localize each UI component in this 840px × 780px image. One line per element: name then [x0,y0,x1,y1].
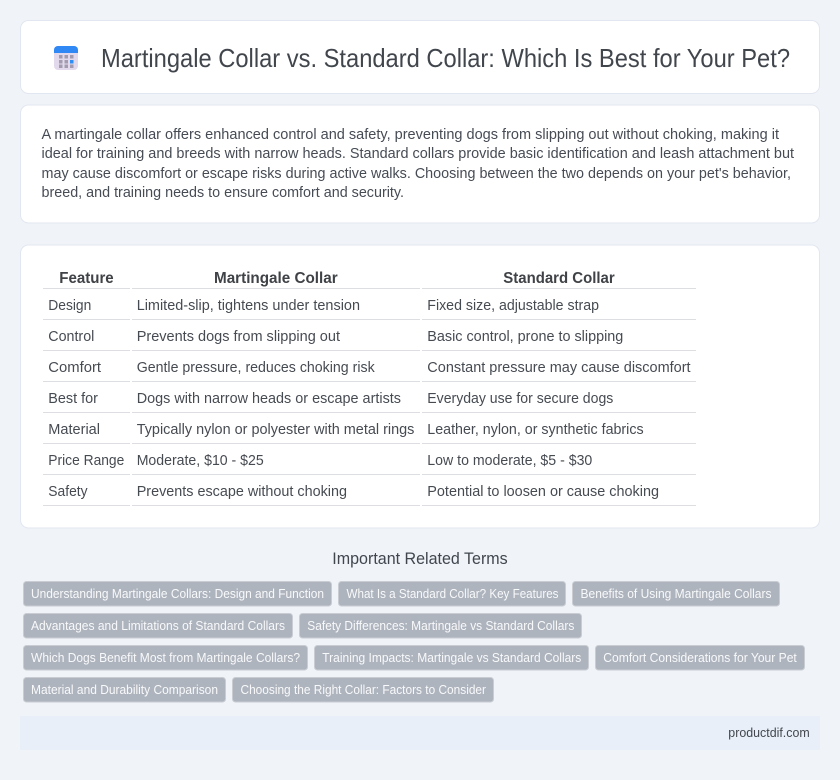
table header: Standard Collar [503,270,615,287]
chip row 3: Which Dogs Benefit Most from Martingale Collars? [31,651,300,665]
chip row 2: Safety Differences: Martingale vs Standard Collars [307,619,574,633]
row: material: Material [48,422,100,438]
panel: comparison table [20,245,820,528]
row: material: Leather, nylon, or synthetic fabrics [427,422,644,438]
table rules [43,288,696,506]
row: best for: Dogs with narrow heads or escape artists [137,391,401,407]
chip row 1: Benefits of Using Martingale Collars [580,587,772,601]
chip row 4 [24,678,494,702]
row: best for: Best for [48,391,98,407]
icon: calendar [54,46,78,70]
chip row 1 [24,582,780,606]
footer source: productdif.com [728,726,810,740]
row: design: Fixed size, adjustable strap [427,298,599,314]
intro text [42,126,795,201]
footer [20,716,820,750]
row: best for [48,391,613,407]
row: material [48,422,644,438]
row: comfort: Comfort [48,360,101,376]
row: control [48,329,623,345]
table header [59,270,615,287]
row: comfort [48,360,691,376]
row: comfort: Gentle pressure, reduces choking risk [137,360,375,376]
title: Martingale Collar vs. Standard Collar: Which Is Best for Your Pet? [101,45,790,73]
chip row 3 [24,646,804,670]
panel: intro paragraph [20,105,820,223]
row: comfort: Constant pressure may cause discomfort [427,360,691,376]
row: material: Typically nylon or polyester with metal rings [137,422,414,438]
row: price range [48,453,592,469]
intro text: A martingale collar offers enhanced control and safety, preventing dogs from slipping out without choking, making it [42,126,780,143]
row: best for: Everyday use for secure dogs [427,391,613,407]
row: price range: Low to moderate, $5 - $30 [427,453,592,469]
chip row 3: Training Impacts: Martingale vs Standard Collars [322,651,581,665]
row: safety: Safety [48,484,88,500]
row: price range: Price Range [48,453,124,469]
row: design: Design [48,298,91,314]
row: design [48,298,599,314]
title panel [20,20,820,94]
table header: Martingale Collar [214,270,338,287]
chip row 2: Advantages and Limitations of Standard Collars [31,619,285,633]
table header: Feature [59,270,114,287]
related term chips [24,582,804,702]
row: safety: Potential to loosen or cause choking [427,484,659,500]
row: control: Basic control, prone to slipping [427,329,623,345]
chip row 3: Comfort Considerations for Your Pet [603,651,797,665]
heading: important related terms: Important Related Terms [332,550,508,568]
row: safety [48,484,659,500]
intro text: may cause discomfort or escape risks during active walks. Choosing between the two depends on your pet's behavior, [42,165,791,182]
intro text: breed, and training needs to ensure comfort and security. [42,184,404,201]
chip row 4: Material and Durability Comparison [31,683,218,697]
chip row 1: What Is a Standard Collar? Key Features [346,587,558,601]
row: control: Control [48,329,94,345]
row: safety: Prevents escape without choking [137,484,347,500]
chip row 1: Understanding Martingale Collars: Design and Function [31,587,324,601]
chip row 4: Choosing the Right Collar: Factors to Consider [240,683,486,697]
chip row 2 [24,614,582,638]
intro text: ideal for training and breeds with narrow heads. Standard collars provide basic identification and leash attachment but [42,145,795,162]
row: design: Limited-slip, tightens under tension [137,298,360,314]
row: price range: Moderate, $10 - $25 [137,453,264,469]
row: control: Prevents dogs from slipping out [137,329,340,345]
